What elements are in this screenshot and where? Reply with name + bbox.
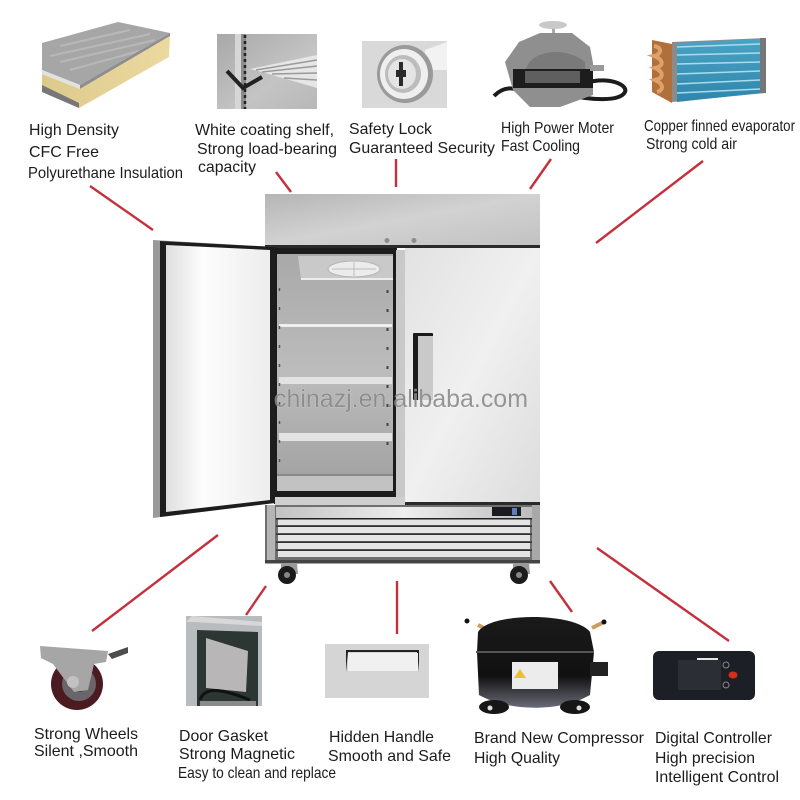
door jamb	[396, 250, 405, 506]
heading: handle: Smooth and Safe	[328, 748, 451, 765]
watermark: chinazj.en.alibaba.com	[274, 385, 528, 413]
heading: compressor	[474, 730, 645, 767]
heading: insulation: Polyurethane Insulation	[28, 165, 183, 182]
open door	[153, 240, 275, 518]
heading: controller: Digital Controller	[655, 730, 773, 747]
refrigerator	[153, 194, 540, 584]
heading: gasket	[178, 728, 336, 782]
heading: compressor: Brand New Compressor	[474, 730, 645, 747]
heading: controller	[655, 730, 779, 786]
display panel	[492, 507, 521, 516]
arrow: evaporator	[596, 161, 703, 243]
arrow: gasket	[246, 586, 266, 615]
image: shelf closeup	[217, 34, 317, 109]
heading: gasket: Door Gasket	[179, 728, 269, 745]
heading: handle: Hidden Handle	[329, 729, 434, 746]
heading: evaporator: Strong cold air	[646, 136, 738, 153]
arrow: handle	[396, 581, 398, 634]
heading: shelf: Strong load-bearing	[197, 141, 337, 158]
caster left	[278, 563, 298, 584]
image: hidden handle	[325, 644, 429, 698]
image: fan motor	[494, 21, 625, 107]
heading: insulation: CFC Free	[29, 144, 99, 161]
arrow: compressor	[550, 581, 572, 612]
arrow: motor	[530, 159, 551, 189]
heading: lock	[349, 121, 495, 157]
top panel	[265, 194, 540, 245]
right door	[405, 248, 540, 502]
arrow: controller	[597, 548, 729, 641]
image: door gasket	[186, 616, 262, 706]
heading: wheels: Silent ,Smooth	[34, 743, 138, 760]
heading: handle	[328, 729, 451, 765]
heading: evaporator	[644, 118, 796, 153]
heading: lock: Guaranteed Security	[349, 140, 495, 157]
heading: wheels: Strong Wheels	[34, 726, 138, 743]
image: safety lock	[362, 41, 447, 108]
base with louvers	[265, 505, 540, 564]
image: caster wheel	[40, 646, 128, 710]
heading: shelf	[195, 122, 337, 176]
heading: insulation	[28, 122, 183, 182]
caster right	[510, 563, 530, 584]
arrow: insulation	[90, 186, 153, 230]
heading: compressor: High Quality	[474, 750, 560, 767]
heading: controller: Intelligent Control	[655, 769, 779, 786]
image: digital controller	[653, 651, 755, 700]
image: insulated panel	[42, 22, 170, 108]
heading: motor	[501, 120, 615, 155]
door handle	[413, 333, 433, 400]
arrow: lock	[395, 159, 397, 187]
arrow: wheels	[92, 535, 218, 631]
heading: shelf: White coating shelf,	[195, 122, 334, 139]
heading: wheels	[34, 726, 138, 760]
heading: gasket: Easy to clean and replace	[178, 765, 336, 782]
interior cabinet	[274, 248, 397, 504]
image: compressor	[464, 617, 608, 714]
heading: insulation: High Density	[29, 122, 119, 139]
heading: motor: Fast Cooling	[501, 138, 580, 155]
heading: gasket: Strong Magnetic	[179, 746, 295, 763]
heading: shelf: capacity	[198, 159, 256, 176]
heading: controller: High precision	[655, 750, 755, 767]
arrow: shelf	[276, 172, 291, 192]
heading: lock: Safety Lock	[349, 121, 433, 138]
heading: motor: High Power Moter	[501, 120, 615, 137]
image: copper evaporator	[652, 38, 766, 103]
